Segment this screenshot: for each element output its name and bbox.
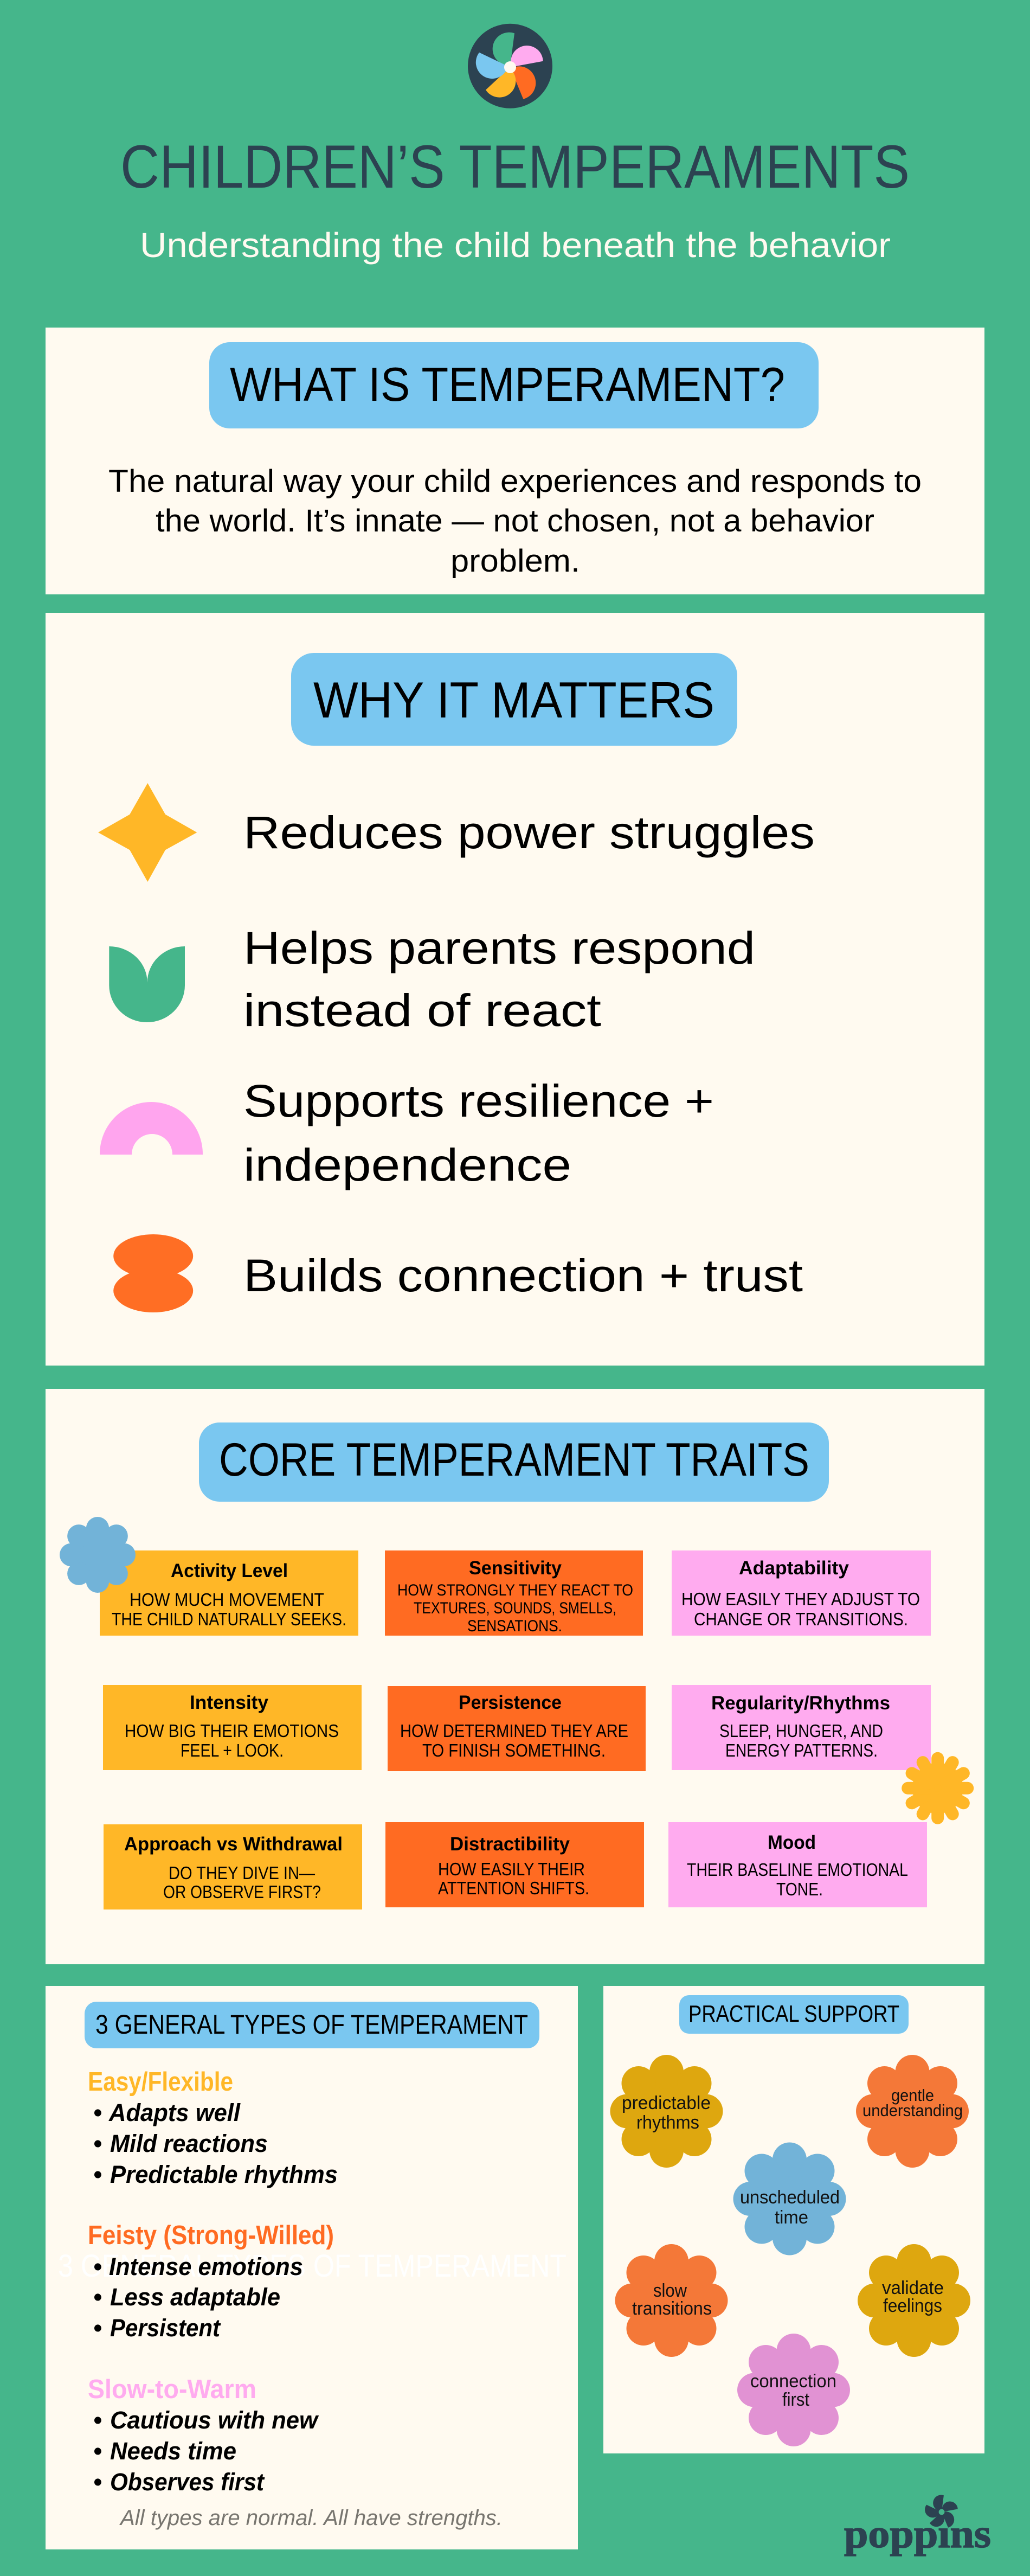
trait card: intensity: Intensity — [190, 1692, 269, 1713]
trait card: adaptability: Adaptability — [739, 1558, 849, 1579]
trait card: sensitivity: HOW STRONGLY THEY REACT TO — [397, 1581, 633, 1599]
flower: gentle understanding: gentle — [891, 2086, 934, 2105]
trait card: sensitivity — [385, 1550, 643, 1636]
trait card: regularity and rhythms: Regularity/Rhythms — [711, 1693, 890, 1714]
type: feisty strong-willed — [88, 2221, 334, 2342]
trait card: sensitivity: TEXTURES, SOUNDS, SMELLS, — [414, 1599, 616, 1617]
type: slow-to-warm: Cautious with new — [110, 2406, 319, 2434]
trait card: persistence: TO FINISH SOMETHING. — [422, 1740, 606, 1760]
flower: gentle understanding — [856, 2055, 969, 2168]
trait card: activity level: HOW MUCH MOVEMENT — [130, 1590, 324, 1610]
type: easy flexible: Predictable rhythms — [110, 2161, 338, 2188]
trait card: mood: TONE. — [776, 1879, 823, 1899]
panel: what is temperament — [46, 328, 984, 594]
type: feisty strong-willed: • — [93, 2314, 102, 2342]
flower: predictable rhythms: predictable — [622, 2093, 711, 2113]
text: helps parents respond: Helps parents respond — [243, 922, 755, 973]
trait card: sensitivity: SENSATIONS. — [467, 1617, 562, 1635]
trait card: persistence — [388, 1686, 646, 1771]
text: helps parents respond: instead of react — [243, 985, 601, 1036]
heading: practical support — [679, 1995, 909, 2034]
text: builds connection: Builds connection + trust — [243, 1250, 803, 1301]
trait card: adaptability: CHANGE OR TRANSITIONS. — [694, 1609, 908, 1629]
flower: unscheduled time — [733, 2142, 846, 2255]
heading: why it matters — [291, 653, 737, 746]
trait card: persistence: HOW DETERMINED THEY ARE — [400, 1721, 628, 1741]
type: easy flexible — [88, 2067, 338, 2188]
text: supports resilience: independence — [243, 1139, 571, 1190]
text: reduces power struggles: Reduces power struggles — [243, 807, 815, 858]
flower: validate feelings: feelings — [883, 2296, 942, 2316]
type: easy flexible: Mild reactions — [110, 2130, 268, 2157]
text: helps parents respond — [243, 922, 755, 1036]
trait card: adaptability: HOW EASILY THEY ADJUST TO — [681, 1589, 920, 1609]
decoration: yellow flower — [902, 1752, 974, 1824]
trait card: approach vs withdrawal: Approach vs Withdrawal — [124, 1834, 343, 1855]
type: easy flexible: • — [93, 2161, 102, 2188]
type: feisty strong-willed: • — [93, 2253, 102, 2280]
trait card: distractibility — [385, 1822, 644, 1907]
trait card: approach vs withdrawal — [104, 1824, 362, 1909]
text block: definition: problem. — [450, 543, 580, 579]
trait card: mood: THEIR BASELINE EMOTIONAL — [687, 1860, 908, 1880]
trait card: distractibility: Distractibility — [450, 1834, 570, 1855]
flower: gentle understanding: understanding — [862, 2101, 963, 2120]
heading: what is temperament: WHAT IS TEMPERAMENT? — [230, 357, 785, 411]
heading: what is temperament — [209, 342, 819, 428]
trait card: mood: Mood — [768, 1832, 816, 1853]
title: CHILDREN’S TEMPERAMENTS — [120, 133, 910, 201]
panel: practical support — [603, 1986, 984, 2453]
trait card: regularity and rhythms — [672, 1685, 931, 1770]
text block: definition: the world. It’s innate — not chosen, not a behavior — [156, 503, 874, 539]
trait card: intensity: HOW BIG THEIR EMOTIONS — [125, 1721, 339, 1741]
text: supports resilience — [243, 1075, 714, 1190]
type: slow-to-warm: Slow-to-Warm — [88, 2375, 256, 2404]
trait card: approach vs withdrawal: OR OBSERVE FIRST? — [163, 1882, 321, 1902]
type: slow-to-warm: Observes first — [110, 2468, 265, 2496]
type: slow-to-warm — [88, 2375, 319, 2496]
heading: 3 general types: 3 GENERAL TYPES OF TEMPERAMENT — [95, 2009, 528, 2040]
flower: slow transitions: slow — [653, 2280, 687, 2301]
type: feisty strong-willed: • — [93, 2283, 102, 2311]
trait card: approach vs withdrawal: DO THEY DIVE IN— — [169, 1863, 315, 1883]
icon: green tulip — [109, 946, 185, 1022]
trait card: regularity and rhythms: SLEEP, HUNGER, AND — [719, 1721, 883, 1741]
icon: orange figure eight — [113, 1234, 193, 1312]
heading: core temperament traits — [199, 1422, 829, 1502]
note: all types are normal: All types are normal. All have strengths. — [119, 2506, 503, 2530]
text: supports resilience: Supports resilience + — [243, 1075, 714, 1126]
icon: yellow star — [98, 783, 197, 882]
panel: core temperament traits — [46, 1389, 984, 1964]
trait card: activity level: Activity Level — [171, 1560, 288, 1581]
trait card: sensitivity: Sensitivity — [469, 1558, 562, 1579]
text block: definition: The natural way your child experiences and responds to — [108, 464, 922, 499]
type: easy flexible: Easy/Flexible — [88, 2067, 233, 2097]
type: feisty strong-willed: Feisty (Strong-Willed) — [88, 2221, 334, 2250]
decoration: blue flower — [60, 1517, 136, 1593]
flower: predictable rhythms — [610, 2055, 723, 2168]
type: slow-to-warm: Needs time — [110, 2437, 236, 2465]
type: easy flexible: Adapts well — [108, 2099, 241, 2126]
subtitle: Understanding the child beneath the behavior — [140, 226, 891, 265]
flower: unscheduled time: time — [775, 2207, 808, 2228]
trait card: adaptability — [672, 1550, 931, 1636]
trait card: distractibility: ATTENTION SHIFTS. — [438, 1878, 589, 1898]
panel: why it matters — [46, 613, 984, 1366]
type: easy flexible: • — [93, 2130, 102, 2157]
trait card: distractibility: HOW EASILY THEIR — [438, 1859, 585, 1879]
trait card: activity level: THE CHILD NATURALLY SEEKS. — [112, 1609, 346, 1629]
flower: validate feelings — [858, 2244, 970, 2357]
type: slow-to-warm: • — [93, 2406, 102, 2434]
heading: 3 general types — [85, 2002, 539, 2048]
panel: three general types — [46, 1986, 578, 2549]
icon: pink arch — [100, 1102, 203, 1155]
type: slow-to-warm: • — [93, 2437, 102, 2465]
heading: why it matters: WHY IT MATTERS — [313, 671, 714, 728]
heading: practical support: PRACTICAL SUPPORT — [688, 2001, 899, 2027]
flower: connection first: first — [782, 2389, 809, 2410]
flower: unscheduled time: unscheduled — [740, 2187, 840, 2208]
flower: connection first: connection — [750, 2371, 836, 2392]
footer logo: poppins: poppins — [844, 2512, 991, 2556]
type: feisty strong-willed: Intense emotions — [109, 2253, 303, 2280]
trait card: persistence: Persistence — [459, 1692, 562, 1713]
trait card: mood — [668, 1822, 927, 1907]
flower: validate feelings: validate — [882, 2278, 944, 2298]
type: easy flexible: • — [93, 2099, 102, 2126]
type: feisty strong-willed: Persistent — [110, 2314, 221, 2342]
flower: predictable rhythms: rhythms — [636, 2112, 699, 2133]
footer logo: poppins — [844, 2495, 991, 2556]
type: slow-to-warm: • — [93, 2468, 102, 2496]
trait card: activity level — [100, 1550, 358, 1636]
flower: connection first — [737, 2334, 850, 2446]
type: feisty strong-willed: Less adaptable — [110, 2283, 280, 2311]
trait card: intensity — [103, 1685, 362, 1770]
flower: slow transitions — [615, 2244, 728, 2357]
trait card: intensity: FEEL + LOOK. — [181, 1740, 284, 1760]
trait card: regularity and rhythms: ENERGY PATTERNS. — [725, 1740, 878, 1760]
heading: core temperament traits: CORE TEMPERAMENT TRAITS — [219, 1434, 809, 1486]
ghost text: faded repeated heading: 3 GENERAL TYPES OF TEMPERAMENT — [58, 2248, 566, 2284]
flower: slow transitions: transitions — [632, 2298, 712, 2319]
text block: definition — [108, 464, 922, 579]
icon: pinwheel logo — [468, 24, 552, 108]
